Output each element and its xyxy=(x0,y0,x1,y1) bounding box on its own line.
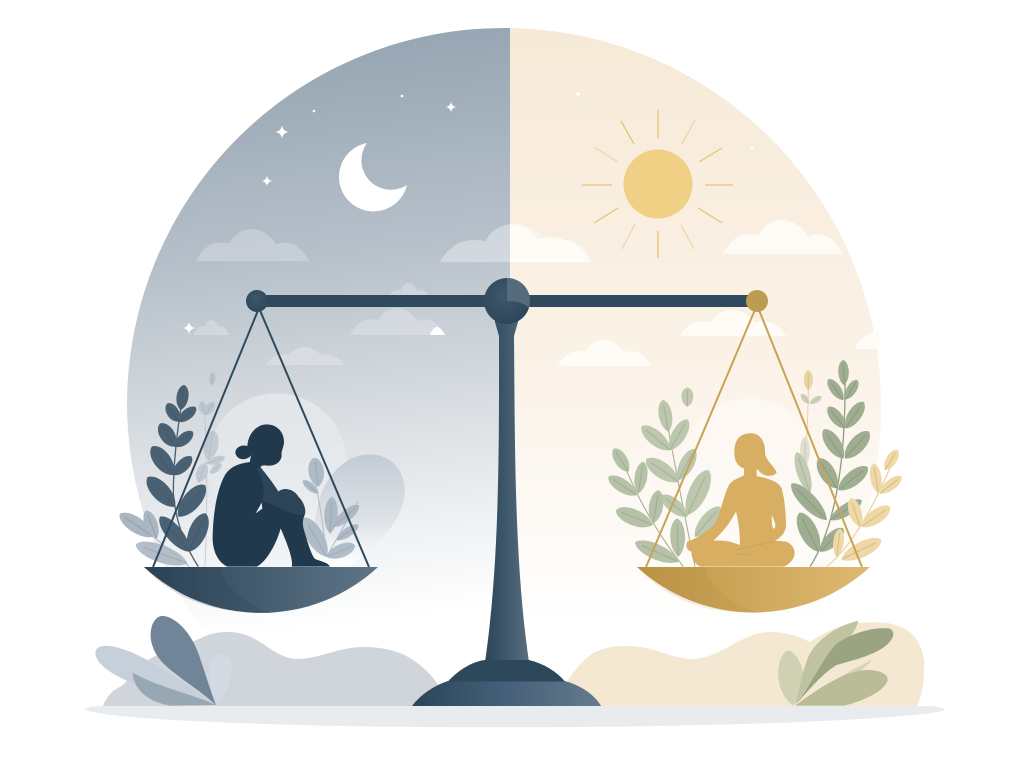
left pan xyxy=(144,567,378,613)
bud xyxy=(681,387,693,407)
day clouds xyxy=(510,220,881,366)
background circle: night half xyxy=(127,28,510,598)
icon: sun xyxy=(582,110,733,258)
beam centre pivot xyxy=(484,278,530,324)
pale foreground leaves xyxy=(115,508,190,572)
plants: bottom right xyxy=(778,621,893,706)
beam end: left xyxy=(246,290,268,312)
figure: person hugging knees xyxy=(213,424,330,567)
hill: day xyxy=(560,622,924,706)
halo behind figure xyxy=(207,393,347,533)
sage plant right xyxy=(786,360,875,567)
halo behind figure xyxy=(682,398,818,535)
scale column xyxy=(485,318,529,662)
night stars xyxy=(182,95,456,334)
scale base xyxy=(412,660,601,706)
dark plant xyxy=(141,384,214,567)
left pan group plants and figure xyxy=(115,372,405,572)
beam end: right xyxy=(746,290,768,312)
small back plant xyxy=(799,370,823,480)
plants: bottom left xyxy=(95,616,232,706)
scale rope lines: right xyxy=(646,305,862,567)
plant right of figure xyxy=(297,457,362,563)
right pan xyxy=(637,567,870,613)
background circle: day half xyxy=(510,28,881,742)
right pan group plants and figure xyxy=(605,360,905,569)
hill: night xyxy=(103,632,450,706)
yellow plant xyxy=(827,447,905,567)
small bright cloud cap xyxy=(430,327,445,335)
ground shadow xyxy=(85,706,945,727)
faded back plant xyxy=(193,372,226,567)
night clouds xyxy=(194,224,543,365)
scale rope lines: left xyxy=(153,308,369,567)
sage plant far left xyxy=(605,445,686,569)
illustration: balance scale xyxy=(85,28,945,728)
figure: person meditating xyxy=(686,433,795,567)
icon: crescent moon xyxy=(339,143,407,211)
day stars xyxy=(574,90,754,150)
scale beam xyxy=(257,295,757,307)
sage plant centre-left xyxy=(637,399,726,567)
pale leaf blob xyxy=(307,454,405,567)
